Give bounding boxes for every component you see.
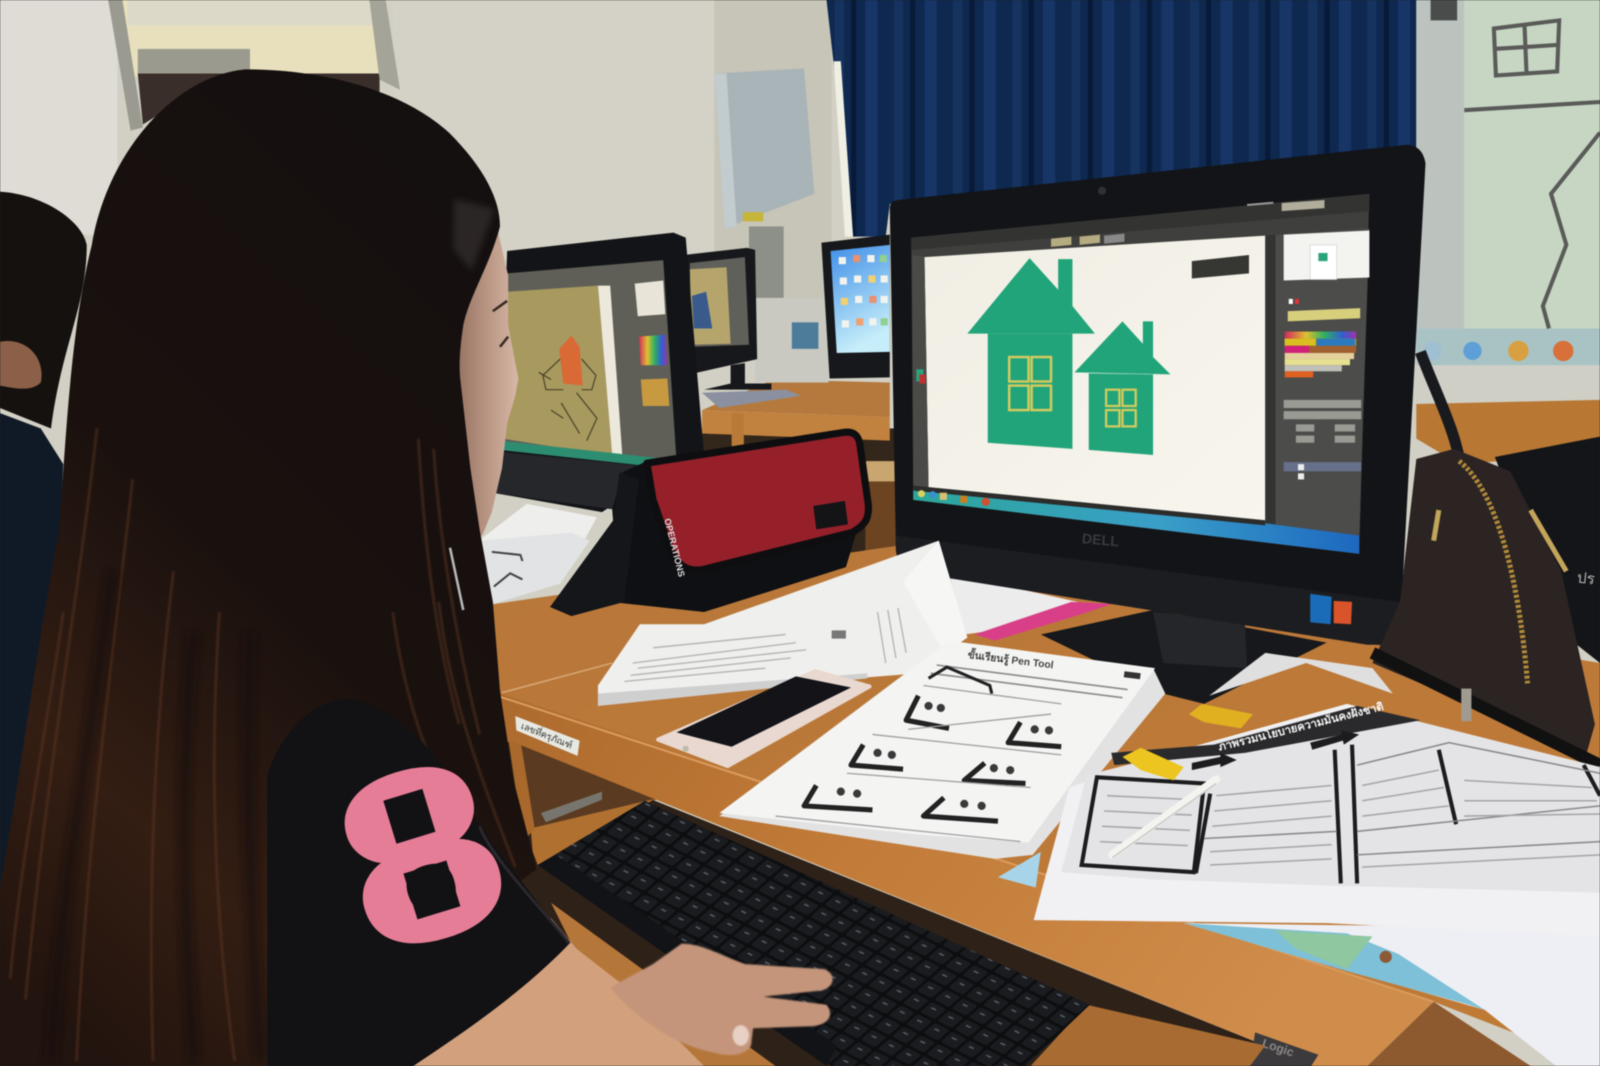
paper and pink folder behind monitor <box>949 573 1112 641</box>
background monitor: tan drawing <box>684 248 771 390</box>
black keyboard <box>538 801 1090 1066</box>
left tool panel <box>912 255 929 489</box>
left neighbour student <box>0 192 87 918</box>
black polo shirt <box>267 699 569 1066</box>
tooltip on artboard <box>1192 255 1249 278</box>
desk front edge <box>439 673 1531 1066</box>
eye and brow <box>493 301 508 347</box>
projector screen <box>1416 0 1600 404</box>
worksheet instruction lines <box>776 686 1061 842</box>
handbag on the right <box>1372 352 1600 765</box>
worksheet heading: ขั้นเรียนรู้ Pen Tool <box>967 646 1055 672</box>
background monitor: orange house drawing <box>485 233 704 512</box>
dark hair locks <box>51 571 260 1061</box>
main monitor <box>890 145 1426 645</box>
back desk and shelf <box>702 379 896 556</box>
desk label plate <box>515 716 580 756</box>
house drawing on screen <box>967 258 1170 455</box>
brand plate on desk corner: Logic <box>1260 1036 1296 1060</box>
background monitor: desktop icons <box>821 235 890 378</box>
brand name on chin: DELL <box>1081 531 1120 550</box>
hair strands <box>10 428 515 1061</box>
worksheet figure eyes <box>837 702 1053 810</box>
red messenger bag <box>550 432 868 616</box>
woman's face <box>449 232 518 551</box>
large green house <box>967 258 1095 449</box>
main monitor stand <box>1041 610 1393 704</box>
pink number patch: 8 <box>312 708 531 1002</box>
webcam <box>1098 187 1106 195</box>
front desk top <box>439 546 1600 1066</box>
black title banner <box>1111 706 1420 765</box>
hand on keyboard <box>610 944 833 1055</box>
desk label plate: เลขที่ครุภัณฑ์ <box>519 719 575 751</box>
screen <box>911 194 1369 554</box>
bag label <box>813 501 848 529</box>
pen tool curve diagram <box>929 667 992 694</box>
blue curtain <box>827 0 1420 237</box>
app menu bar <box>911 194 1369 250</box>
large policy chart handout: ภาพรวมนโยบายความมั่นคงฝั่งชาติ <box>1216 698 1385 754</box>
brand plate on desk corner <box>1250 1032 1318 1066</box>
layers panel rows <box>1284 462 1361 479</box>
monitor bezel <box>890 145 1426 645</box>
windows taskbar <box>913 486 1359 554</box>
pale hair tie strand <box>450 548 463 610</box>
black bag at far right: ปร <box>1576 570 1596 588</box>
brand tag: OPERATIONS <box>662 517 687 578</box>
keyboard tray wood <box>551 903 1265 1066</box>
blue sheet under lower paper <box>998 852 1600 1066</box>
smartphone <box>658 671 869 766</box>
small green house <box>1074 321 1170 455</box>
chart body text lines <box>1100 770 1600 867</box>
bag flap <box>647 432 868 570</box>
worksheet figures <box>804 696 1061 821</box>
dark space under desk <box>439 704 1265 1066</box>
arm of the woman <box>408 918 704 1066</box>
yellow candies <box>1122 704 1253 780</box>
bag body and strap <box>550 461 863 616</box>
white pen <box>1112 779 1216 858</box>
chart frame lines <box>1082 745 1600 883</box>
flow arrows <box>1192 730 1359 770</box>
papers behind red bag <box>482 504 597 604</box>
curved handout stack on left of desk <box>598 541 967 706</box>
windows sticker <box>1334 601 1352 624</box>
right side panels <box>1265 229 1369 536</box>
hair sheen near temple <box>454 199 495 270</box>
artboard <box>924 236 1265 523</box>
pen tool worksheet <box>719 641 1165 859</box>
intel sticker <box>1310 594 1332 624</box>
electrical box on wall <box>714 68 814 300</box>
large policy chart handout <box>1034 698 1600 936</box>
white printer device <box>755 298 829 383</box>
far right desk surface <box>1416 400 1600 464</box>
window and ceiling in doorway <box>108 0 400 131</box>
character panel fields <box>1284 400 1361 443</box>
projected sketch lines <box>1464 20 1600 328</box>
black bag at far right <box>1495 437 1600 663</box>
colour swatches <box>1285 332 1356 377</box>
long dark hair <box>0 69 537 1066</box>
